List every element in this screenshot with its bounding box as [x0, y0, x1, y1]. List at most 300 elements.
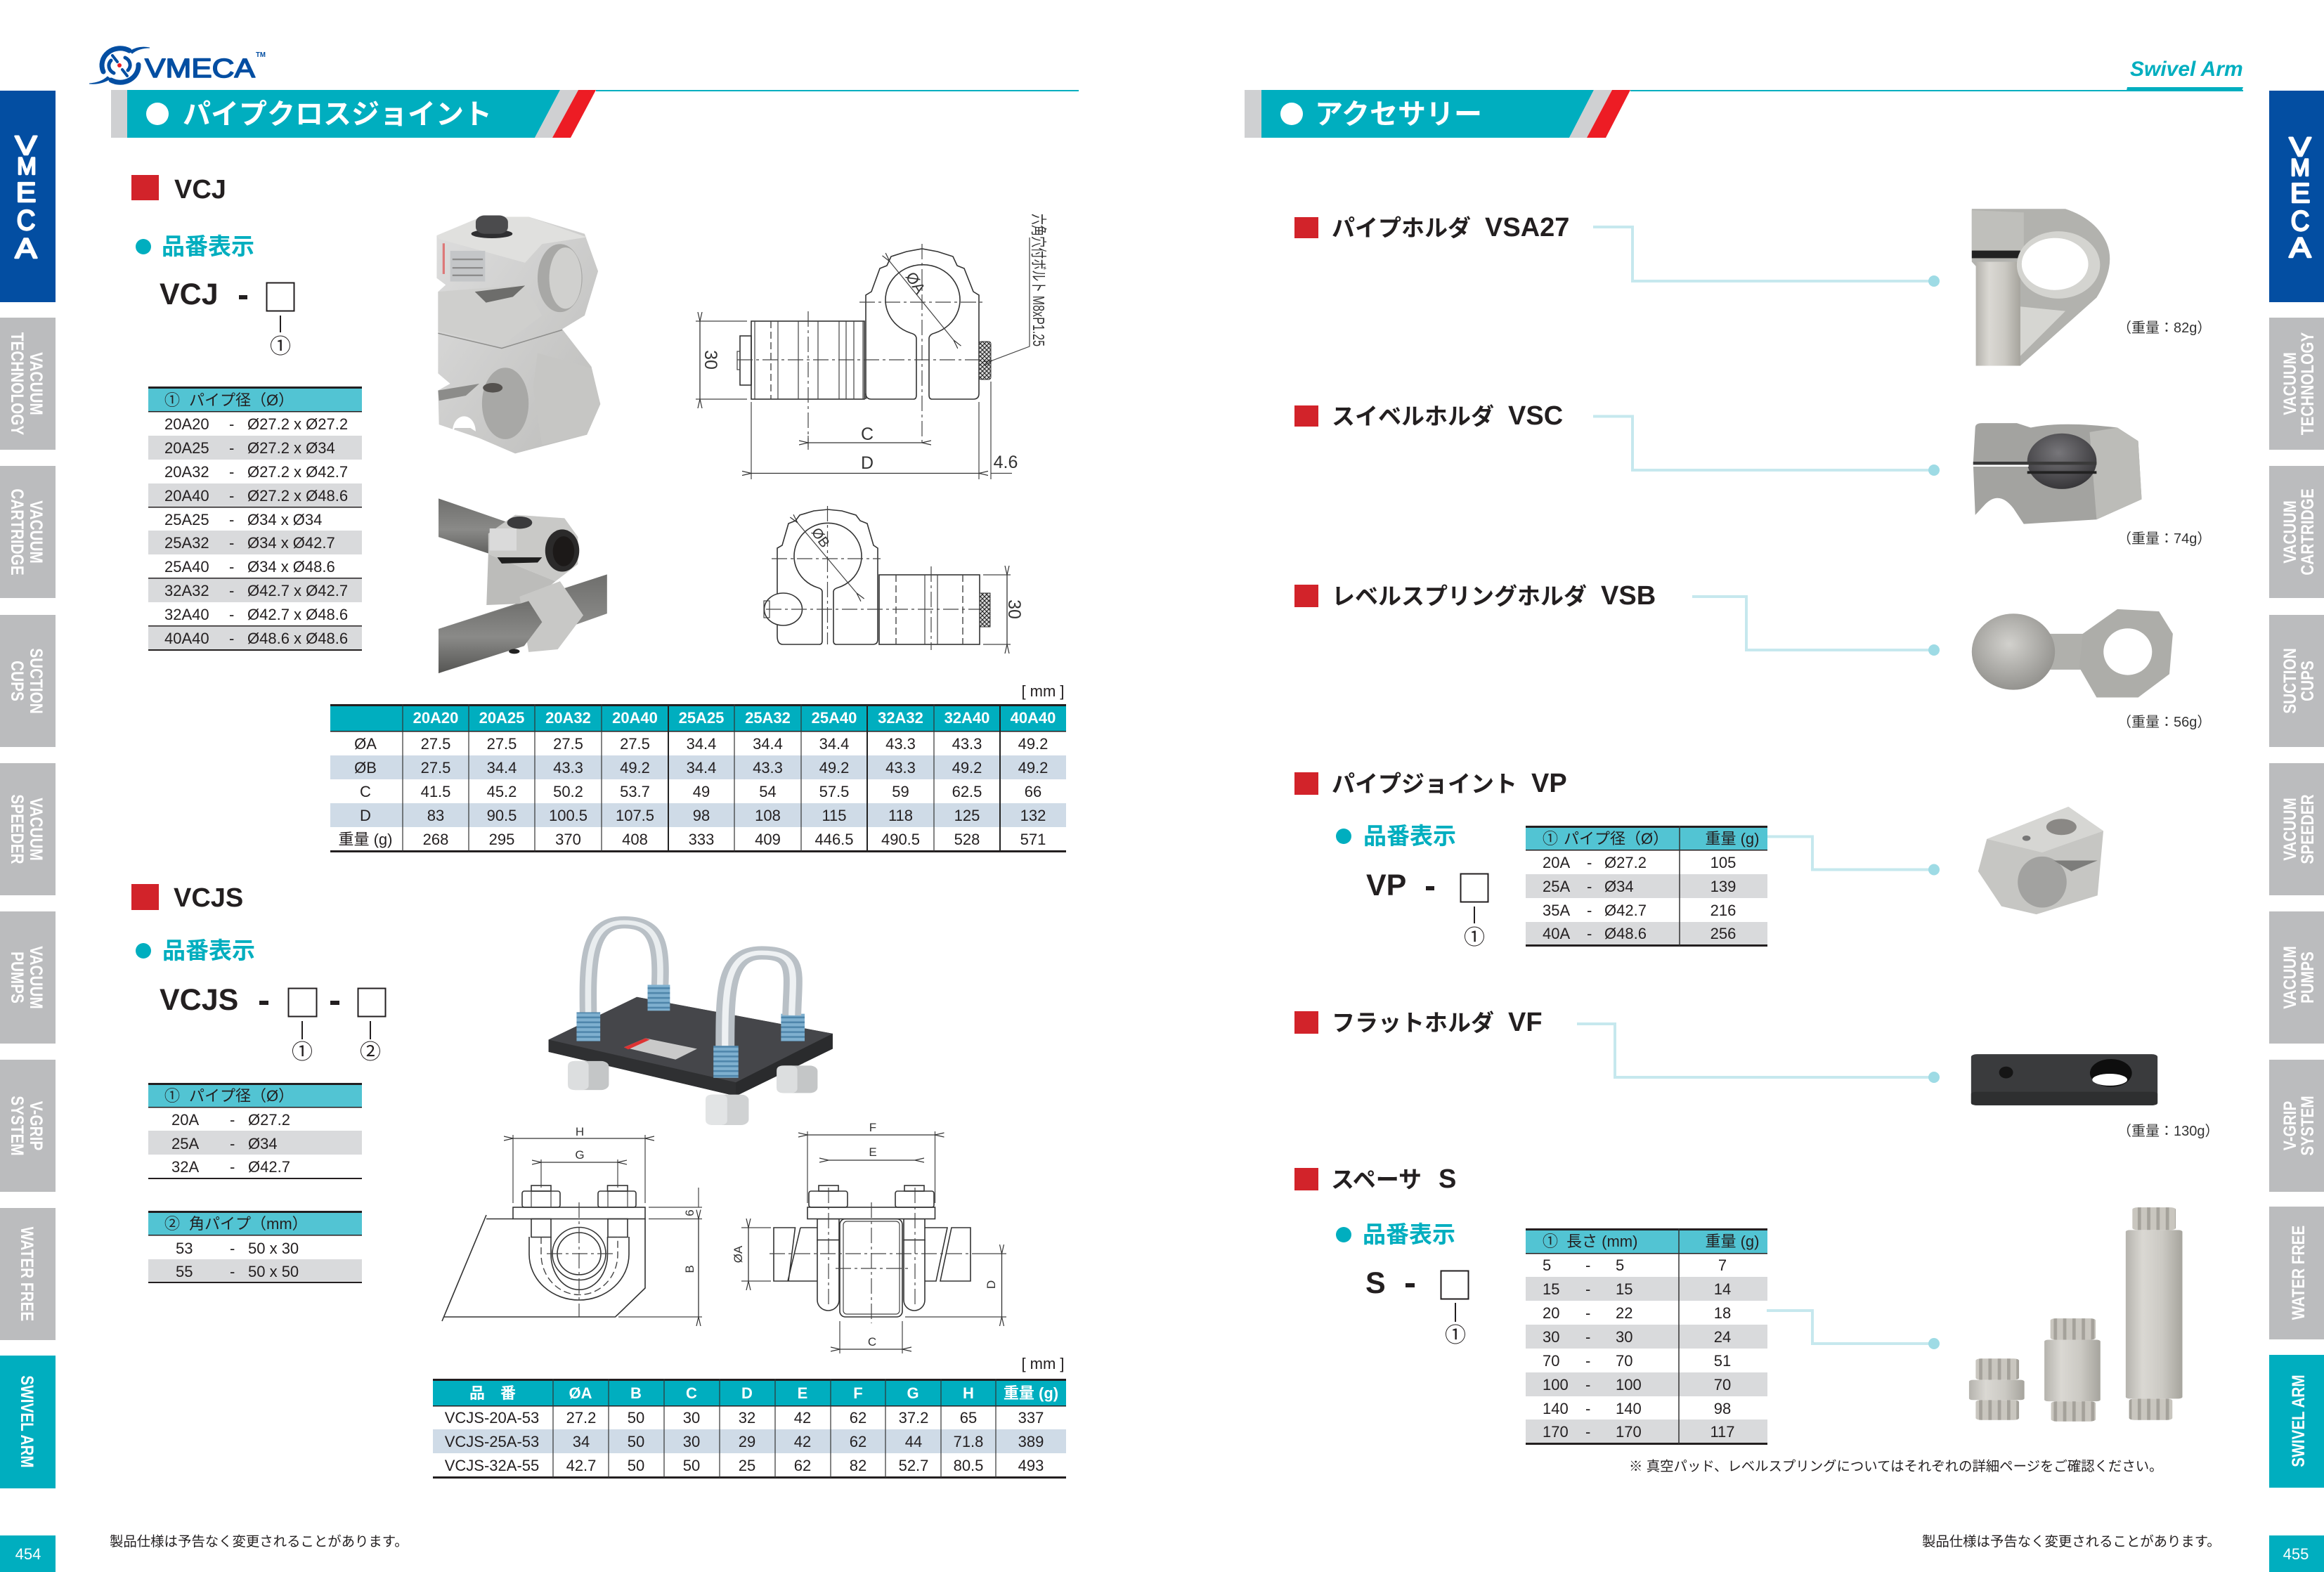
- tab: suction cups: SUCTION: [2280, 648, 2299, 714]
- table: VCJ dimensions: 27.5: [421, 759, 450, 777]
- table: VP sizes: -: [1587, 878, 1592, 895]
- table: VCJS dimensions: C: [686, 1384, 697, 1402]
- table: VCJS dimensions: VCJS-25A-53: [445, 1433, 539, 1450]
- table: pipe diameter codes VCJS: ①: [164, 1087, 180, 1105]
- tab: vacuum pumps: VACUUM: [27, 946, 46, 1009]
- table: VCJS dimensions: 493: [1018, 1457, 1044, 1474]
- table: VP sizes: -: [1587, 854, 1592, 871]
- table: VP sizes: 35A: [1543, 902, 1570, 919]
- tab: vacuum speeder: [0, 763, 56, 895]
- item: VSC swivel holder: スイベルホルダ VSC: [1332, 401, 1563, 431]
- table: S sizes: 15: [1543, 1280, 1559, 1298]
- table: S sizes: [1526, 1228, 1767, 1445]
- table: VP sizes: 139: [1710, 878, 1736, 895]
- tab: vacuum pumps: PUMPS: [8, 951, 27, 1003]
- tab: swivel arm active: [2269, 1355, 2324, 1488]
- tab: swivel arm active: SWIVEL ARM: [18, 1375, 37, 1468]
- table: square pipe codes: -: [230, 1263, 235, 1280]
- tab: vacuum pumps: VACUUM: [2280, 946, 2299, 1009]
- diagram: VCJ side view A: 六角穴付ボルト M8xP1.25: [1030, 214, 1048, 346]
- table: VCJ dimensions: 62.5: [952, 783, 982, 800]
- table: VCJS dimensions: 34: [573, 1433, 590, 1450]
- table: VCJ dimensions: 295: [489, 831, 514, 848]
- table: square pipe codes: 50 x 30: [248, 1240, 299, 1257]
- part number key: VCJS: 品番表示: [162, 937, 255, 963]
- table: VCJS dimensions: 337: [1018, 1409, 1044, 1427]
- table: VCJS dimensions: 62: [850, 1433, 866, 1450]
- table: VCJS dimensions: 50: [628, 1457, 644, 1474]
- tab: swivel arm active: [0, 1356, 56, 1488]
- part number key: VCJS: ①: [292, 1041, 313, 1064]
- header label: Swivel Arm: [2127, 58, 2243, 91]
- tab: v-grip system: SYSTEM: [2297, 1096, 2317, 1156]
- table: VP sizes: 216: [1710, 902, 1736, 919]
- table: VCJ dimensions: 34.4: [753, 735, 783, 753]
- part number key: VP: ①: [1464, 926, 1485, 949]
- tab: VMECA brand: V: [15, 131, 37, 160]
- table: S sizes: -: [1585, 1280, 1590, 1298]
- table: pipe diameter codes VCJS: パイプ径（Ø）: [189, 1087, 294, 1105]
- weight: 82g: （重量：82g）: [2117, 320, 2211, 336]
- tab: vacuum cartridge: CARTRIDGE: [8, 488, 27, 576]
- page number 455: [2269, 1535, 2324, 1572]
- table: VP sizes: Ø42.7: [1604, 902, 1647, 919]
- diagram: VCJS front view: H: [576, 1125, 584, 1138]
- table: S sizes: -: [1585, 1352, 1590, 1370]
- diagram: VCJS side view: F: [869, 1121, 876, 1134]
- table: VCJ dimensions: 370: [555, 831, 581, 848]
- table: S sizes: 70: [1616, 1352, 1632, 1370]
- table: pipe diameter codes VCJ: パイプ径（Ø）: [189, 391, 294, 409]
- table: pipe diameter codes VCJ: Ø27.2 x Ø27.2: [247, 415, 348, 433]
- tab: vacuum cartridge: VACUUM: [2280, 500, 2299, 564]
- table: VCJS dimensions: 42: [794, 1409, 811, 1427]
- table: VCJS dimensions: B: [630, 1384, 642, 1402]
- page number 455: 455: [2283, 1545, 2309, 1563]
- tab: vacuum pumps: PUMPS: [2297, 951, 2317, 1003]
- table: VCJ dimensions: ØB: [354, 759, 377, 777]
- photo: VCJS U-bolt plate: [549, 923, 833, 1125]
- tab: VMECA brand: M: [17, 154, 37, 180]
- table: VCJS dimensions: 80.5: [954, 1457, 983, 1474]
- table: VCJ dimensions: 125: [954, 807, 980, 824]
- tab: vacuum technology: TECHNOLOGY: [2297, 332, 2317, 435]
- tab: VMECA brand: C: [2291, 206, 2309, 237]
- diagram: VCJ side view B: 30: [1004, 599, 1024, 619]
- photo: VP: [1978, 807, 2103, 914]
- table: VCJ dimensions: ØA: [354, 735, 377, 753]
- table: S sizes: 117: [1710, 1423, 1735, 1441]
- table: VCJS dimensions: 62: [850, 1409, 866, 1427]
- table: VCJ dimensions: [330, 704, 1066, 852]
- tab: vacuum speeder: VACUUM: [2280, 798, 2299, 861]
- table: pipe diameter codes VCJS: Ø27.2: [248, 1111, 290, 1129]
- table: VCJS dimensions: 52.7: [899, 1457, 928, 1474]
- table: VCJ dimensions: 27.5: [421, 735, 450, 753]
- table: VCJS dimensions: VCJS-32A-55: [445, 1457, 539, 1474]
- table: pipe diameter codes VCJS: -: [230, 1158, 235, 1176]
- diagram: VCJ side view A: ØA: [902, 268, 929, 297]
- unit label: mm: [ mm ]: [1021, 682, 1065, 700]
- table: VCJS dimensions: 50: [628, 1433, 644, 1450]
- table: pipe diameter codes VCJ: 40A40: [164, 630, 209, 647]
- table: S sizes: 140: [1616, 1400, 1642, 1417]
- tab: vacuum cartridge: VACUUM: [27, 500, 46, 564]
- tab: VMECA brand: E: [2290, 178, 2310, 209]
- logo: VMECA: [89, 47, 266, 84]
- diagram: VCJ side view A: 4.6: [994, 453, 1018, 472]
- table: VCJ dimensions: 25A32: [745, 709, 791, 727]
- table: VP sizes: -: [1587, 902, 1592, 919]
- part number key: VP: 品番表示: [1363, 823, 1456, 849]
- photo: VCJ cross joint: [436, 216, 600, 453]
- table: VCJS dimensions: 37.2: [899, 1409, 928, 1427]
- table: VCJ dimensions: 43.3: [885, 735, 916, 753]
- diagram: VCJ side view A: 30: [701, 350, 720, 370]
- table: VCJS dimensions: H: [963, 1384, 974, 1402]
- table: pipe diameter codes VCJ: -: [229, 606, 234, 623]
- table: VCJ dimensions: 40A40: [1011, 709, 1056, 727]
- tab: suction cups: CUPS: [8, 661, 27, 701]
- item: VSB level spring holder: [1294, 581, 2211, 730]
- table: VCJ dimensions: 98: [693, 807, 710, 824]
- table: S sizes: 70: [1714, 1376, 1731, 1394]
- table: pipe diameter codes VCJ: Ø42.7 x Ø48.6: [247, 606, 348, 623]
- diagram: VCJ side view B: [764, 506, 1024, 650]
- table: pipe diameter codes VCJ: Ø27.2 x Ø34: [247, 439, 335, 457]
- table: S sizes: 24: [1714, 1328, 1731, 1346]
- table: pipe diameter codes VCJ: 25A40: [164, 558, 209, 576]
- table: pipe diameter codes VCJ: -: [229, 439, 234, 457]
- section header: pipe cross joint: パイプクロスジョイント: [183, 99, 492, 130]
- tab: VMECA brand: M: [2290, 155, 2310, 181]
- tab: VMECA brand: C: [17, 205, 35, 236]
- tab: suction cups: [2269, 615, 2324, 747]
- table: VCJ dimensions: 115: [822, 807, 847, 824]
- table: S sizes: 重量 (g): [1705, 1233, 1760, 1250]
- tab: water free: WATER FREE: [2288, 1226, 2308, 1320]
- diagram: VCJS side view: ØA: [732, 1245, 745, 1263]
- table: VCJS dimensions: [433, 1379, 1066, 1479]
- table: VCJ dimensions: 408: [622, 831, 648, 848]
- table: VCJ dimensions: 90.5: [487, 807, 517, 824]
- table: S sizes: -: [1585, 1304, 1590, 1322]
- table: VCJ dimensions: 66: [1025, 783, 1041, 800]
- diagram: VCJ side view A: D: [861, 453, 874, 473]
- weight: 130g: （重量：130g）: [2117, 1123, 2219, 1139]
- table: VP sizes: 20A: [1543, 854, 1570, 871]
- table: pipe diameter codes VCJ: Ø27.2 x Ø42.7: [247, 463, 348, 481]
- table: VCJS dimensions: 27.2: [566, 1409, 596, 1427]
- diagram: VCJS side view: D: [985, 1280, 998, 1289]
- part number key: VP: VP: [1366, 869, 1406, 902]
- table: VCJ dimensions: 49.2: [620, 759, 650, 777]
- tab: vacuum cartridge: [2269, 466, 2324, 598]
- table: square pipe codes: ②: [164, 1215, 180, 1233]
- table: S sizes: 98: [1714, 1400, 1731, 1417]
- table: VCJ dimensions: 83: [427, 807, 444, 824]
- table: VCJ dimensions: 49.2: [819, 759, 849, 777]
- table: pipe diameter codes VCJS: [148, 1083, 362, 1179]
- table: S sizes: 100: [1543, 1376, 1569, 1394]
- table: pipe diameter codes VCJ: -: [229, 415, 234, 433]
- tab: VMECA brand: A: [15, 233, 37, 264]
- tab: vacuum technology: TECHNOLOGY: [8, 332, 27, 435]
- table: VP sizes: パイプ径（Ø）: [1564, 830, 1668, 847]
- table: VCJ dimensions: 108: [755, 807, 781, 824]
- table: VCJS dimensions: 29: [739, 1433, 755, 1450]
- tab: vacuum cartridge: CARTRIDGE: [2297, 488, 2317, 576]
- item: VP pipe joint: パイプジョイント VP: [1332, 769, 1567, 798]
- table: pipe diameter codes VCJ: Ø34 x Ø42.7: [247, 534, 335, 552]
- table: pipe diameter codes VCJS: 20A: [171, 1111, 199, 1129]
- tab: water free: [0, 1208, 56, 1340]
- table: S sizes: ①: [1543, 1233, 1558, 1250]
- part number key: VCJ: [136, 233, 294, 358]
- page number 454: 454: [15, 1545, 41, 1563]
- table: VCJS dimensions: 30: [683, 1409, 700, 1427]
- table: VCJ dimensions: D: [360, 807, 371, 824]
- tab: v-grip system: [0, 1060, 56, 1192]
- footer note right: 製品仕様は予告なく変更されることがあります。: [1922, 1534, 2221, 1550]
- table: VCJS dimensions: 65: [960, 1409, 977, 1427]
- table: S sizes: -: [1585, 1376, 1590, 1394]
- table: VCJ dimensions: 25A25: [679, 709, 724, 727]
- table: VCJ dimensions: 49.2: [1018, 759, 1048, 777]
- tab: vacuum technology: [2269, 318, 2324, 450]
- tab: VMECA brand: A: [2290, 233, 2311, 264]
- diagram: VCJS side view: [732, 1121, 1006, 1353]
- table: VCJS dimensions: 品 番: [469, 1384, 516, 1402]
- table: S sizes: 18: [1714, 1304, 1731, 1322]
- table: pipe diameter codes VCJ: 32A40: [164, 606, 209, 623]
- part number key: S: ①: [1445, 1324, 1466, 1347]
- tab: vacuum technology: VACUUM: [27, 352, 46, 415]
- table: pipe diameter codes VCJ: -: [229, 558, 234, 576]
- table: VCJ dimensions: 27.5: [553, 735, 583, 753]
- part number key: VCJS: [136, 937, 385, 1064]
- item: VSC swivel holder: [1294, 401, 2211, 547]
- table: S sizes: 20: [1543, 1304, 1559, 1322]
- item: VF flat holder: フラットホルダ VF: [1332, 1008, 1543, 1037]
- part number key: S: 品番表示: [1363, 1221, 1455, 1247]
- table: pipe diameter codes VCJ: -: [229, 582, 234, 599]
- table: VP sizes: 256: [1710, 925, 1736, 942]
- table: VCJS dimensions: 重量 (g): [1004, 1384, 1058, 1402]
- photo: VSC: [1973, 423, 2142, 524]
- table: VCJ dimensions: 27.5: [620, 735, 650, 753]
- tab: water free: WATER FREE: [18, 1227, 37, 1321]
- table: VCJ dimensions: 54: [759, 783, 777, 800]
- table: VCJ dimensions: 43.3: [753, 759, 783, 777]
- table: VCJ dimensions: 490.5: [881, 831, 920, 848]
- table: S sizes: 15: [1616, 1280, 1632, 1298]
- table: VCJS dimensions: E: [798, 1384, 807, 1402]
- part number key: S: [1336, 1221, 1469, 1347]
- table: S sizes: 70: [1543, 1352, 1559, 1370]
- table: VCJS dimensions: ØA: [569, 1384, 592, 1402]
- table: VCJS dimensions: 25: [739, 1457, 755, 1474]
- table: pipe diameter codes VCJ: [148, 386, 362, 651]
- tab: v-grip system: [2269, 1060, 2324, 1192]
- tab: vacuum speeder: [2269, 763, 2324, 895]
- table: VCJS dimensions: 62: [794, 1457, 811, 1474]
- table: S sizes: 14: [1714, 1280, 1731, 1298]
- table: VP sizes: Ø48.6: [1604, 925, 1647, 942]
- table: S sizes: -: [1585, 1256, 1590, 1274]
- table: VCJS dimensions: 71.8: [954, 1433, 983, 1450]
- heading: VCJ: VCJ: [174, 175, 226, 204]
- diagram: VCJS front view: 6: [683, 1209, 696, 1216]
- table: VCJ dimensions: 57.5: [819, 783, 849, 800]
- table: VCJ dimensions: 100.5: [549, 807, 588, 824]
- table: S sizes: 51: [1714, 1352, 1731, 1370]
- table: VCJ dimensions: 20A32: [545, 709, 591, 727]
- table: pipe diameter codes VCJ: Ø34 x Ø48.6: [247, 558, 335, 576]
- table: S sizes: -: [1585, 1328, 1590, 1346]
- item: VSA27 pipe holder: パイプホルダ VSA27: [1332, 213, 1569, 242]
- table: VCJ dimensions: 34.4: [819, 735, 849, 753]
- item: S spacer: [1294, 1164, 2182, 1445]
- item: VSA27 pipe holder: [1294, 209, 2211, 365]
- table: VCJ dimensions: 50.2: [553, 783, 583, 800]
- table: S sizes: 140: [1543, 1400, 1569, 1417]
- table: VP sizes: -: [1587, 925, 1592, 942]
- table: VCJS dimensions: 44: [905, 1433, 922, 1450]
- table: pipe diameter codes VCJ: -: [229, 463, 234, 481]
- diagram: VCJS front view: [442, 1125, 702, 1321]
- tab: VMECA brand: [0, 91, 56, 302]
- tab: vacuum pumps: [2269, 911, 2324, 1044]
- weight: 74g: （重量：74g）: [2117, 531, 2211, 547]
- photo: VCJ installed on pipes: [439, 498, 607, 673]
- tab: vacuum cartridge: [0, 466, 56, 598]
- diagram: VCJ side view A: C: [861, 424, 874, 444]
- table: pipe diameter codes VCJ: Ø48.6 x Ø48.6: [247, 630, 348, 647]
- tab: v-grip system: V-GRIP: [2280, 1101, 2299, 1150]
- tab: suction cups: [0, 615, 56, 747]
- table: VCJ dimensions: 107.5: [616, 807, 654, 824]
- part number key: VCJ: VCJ: [160, 278, 219, 311]
- table: VP sizes: 40A: [1543, 925, 1570, 942]
- table: VCJ dimensions: 333: [689, 831, 714, 848]
- tab: water free: [2269, 1207, 2324, 1339]
- table: VCJS dimensions: 42.7: [566, 1457, 596, 1474]
- sidebar: left navigation tabs: [0, 91, 56, 1572]
- tab: vacuum technology: [0, 318, 56, 450]
- table: VP sizes: Ø34: [1604, 878, 1634, 895]
- table: VCJ dimensions: 59: [892, 783, 909, 800]
- table: VCJ dimensions: 43.3: [952, 735, 982, 753]
- photo: spacers: [1969, 1207, 2182, 1422]
- table: VCJS dimensions: G: [907, 1384, 919, 1402]
- table: S sizes: -: [1585, 1423, 1590, 1441]
- diagram: VCJ side view A: [696, 214, 1048, 479]
- photo: VSB: [1972, 609, 2173, 697]
- table: VCJ dimensions: 34.4: [687, 735, 716, 753]
- tab: suction cups: SUCTION: [27, 648, 46, 714]
- item: VP pipe joint: [1294, 769, 2103, 949]
- item: S spacer: スペーサ S: [1331, 1164, 1456, 1194]
- table: VCJ dimensions: 20A40: [612, 709, 658, 727]
- part number key: S: S: [1365, 1266, 1386, 1300]
- diagram: VCJS side view: E: [869, 1145, 877, 1159]
- table: VCJ dimensions: 43.3: [553, 759, 583, 777]
- table: VCJ dimensions: 43.3: [885, 759, 916, 777]
- table: VCJ dimensions: 53.7: [620, 783, 650, 800]
- table: VP sizes: 25A: [1543, 878, 1570, 895]
- part number key: VCJS: VCJS: [160, 983, 238, 1017]
- table: VCJ dimensions: 32A32: [878, 709, 923, 727]
- table: square pipe codes: [148, 1211, 362, 1283]
- page number 454: [0, 1535, 56, 1572]
- table: pipe diameter codes VCJ: 20A32: [164, 463, 209, 481]
- tab: v-grip system: SYSTEM: [8, 1096, 27, 1156]
- table: pipe diameter codes VCJ: Ø42.7 x Ø42.7: [247, 582, 348, 599]
- item: VSB level spring holder: レベルスプリングホルダ VSB: [1332, 581, 1656, 611]
- heading: VCJS: [131, 883, 243, 913]
- table: VCJ dimensions: 49.2: [952, 759, 982, 777]
- note: see detail pages: ※ 真空パッド、レベルスプリングについてはそれぞれの詳細ページをご確認ください。: [1629, 1459, 2163, 1474]
- table: VCJS dimensions: 389: [1018, 1433, 1044, 1450]
- table: VCJ dimensions: 132: [1020, 807, 1046, 824]
- table: pipe diameter codes VCJS: -: [230, 1135, 235, 1152]
- table: S sizes: 5: [1543, 1256, 1551, 1274]
- table: VCJ dimensions: 571: [1020, 831, 1046, 848]
- table: pipe diameter codes VCJ: 32A32: [164, 582, 209, 599]
- table: VCJS dimensions: VCJS-20A-53: [445, 1409, 539, 1427]
- table: VCJ dimensions: 49.2: [1018, 735, 1048, 753]
- table: pipe diameter codes VCJ: Ø27.2 x Ø48.6: [247, 487, 348, 505]
- table: VCJS dimensions: 50: [683, 1457, 700, 1474]
- table: VCJ dimensions: 20A20: [413, 709, 458, 727]
- diagram: VCJS front view: B: [683, 1265, 696, 1273]
- table: VCJ dimensions: 34.4: [487, 759, 517, 777]
- table: S sizes: 30: [1543, 1328, 1559, 1346]
- table: S sizes: 5: [1616, 1256, 1624, 1274]
- heading: VCJ: [131, 175, 226, 204]
- table: pipe diameter codes VCJ: -: [229, 630, 234, 647]
- table: pipe diameter codes VCJ: 20A25: [164, 439, 209, 457]
- tab: VMECA brand: V: [2290, 132, 2311, 162]
- table: pipe diameter codes VCJ: -: [229, 487, 234, 505]
- diagram: VCJ side view B: ØB: [808, 525, 833, 551]
- logo: VMECA: TM: [256, 51, 266, 59]
- table: pipe diameter codes VCJ: Ø34 x Ø34: [247, 511, 322, 528]
- section header: accessories: アクセサリー: [1315, 99, 1482, 130]
- table: VCJ dimensions: 27.5: [487, 735, 517, 753]
- logo: VMECA: VMECA: [145, 54, 256, 84]
- table: pipe diameter codes VCJ: 25A25: [164, 511, 209, 528]
- table: square pipe codes: -: [230, 1240, 235, 1257]
- diagram: VCJS side view: C: [868, 1335, 876, 1349]
- table: S sizes: 170: [1616, 1423, 1642, 1441]
- item: VF flat holder: [1294, 1008, 2219, 1139]
- table: pipe diameter codes VCJ: 20A40: [164, 487, 209, 505]
- tab: VMECA brand: E: [16, 177, 36, 208]
- part number key: VP: [1336, 823, 1488, 949]
- table: VCJ dimensions: 重量 (g): [338, 831, 393, 848]
- table: VCJ dimensions: C: [360, 783, 371, 800]
- header label: Swivel Arm: Swivel Arm: [2130, 58, 2243, 81]
- table: VP sizes: [1526, 826, 1767, 947]
- footer note left: 製品仕様は予告なく変更されることがあります。: [110, 1534, 408, 1550]
- tab: swivel arm active: SWIVEL ARM: [2288, 1375, 2308, 1467]
- tab: v-grip system: V-GRIP: [27, 1101, 46, 1150]
- table: pipe diameter codes VCJS: Ø34: [248, 1135, 278, 1152]
- table: S sizes: 7: [1718, 1256, 1727, 1274]
- table: VCJS dimensions: 82: [850, 1457, 866, 1474]
